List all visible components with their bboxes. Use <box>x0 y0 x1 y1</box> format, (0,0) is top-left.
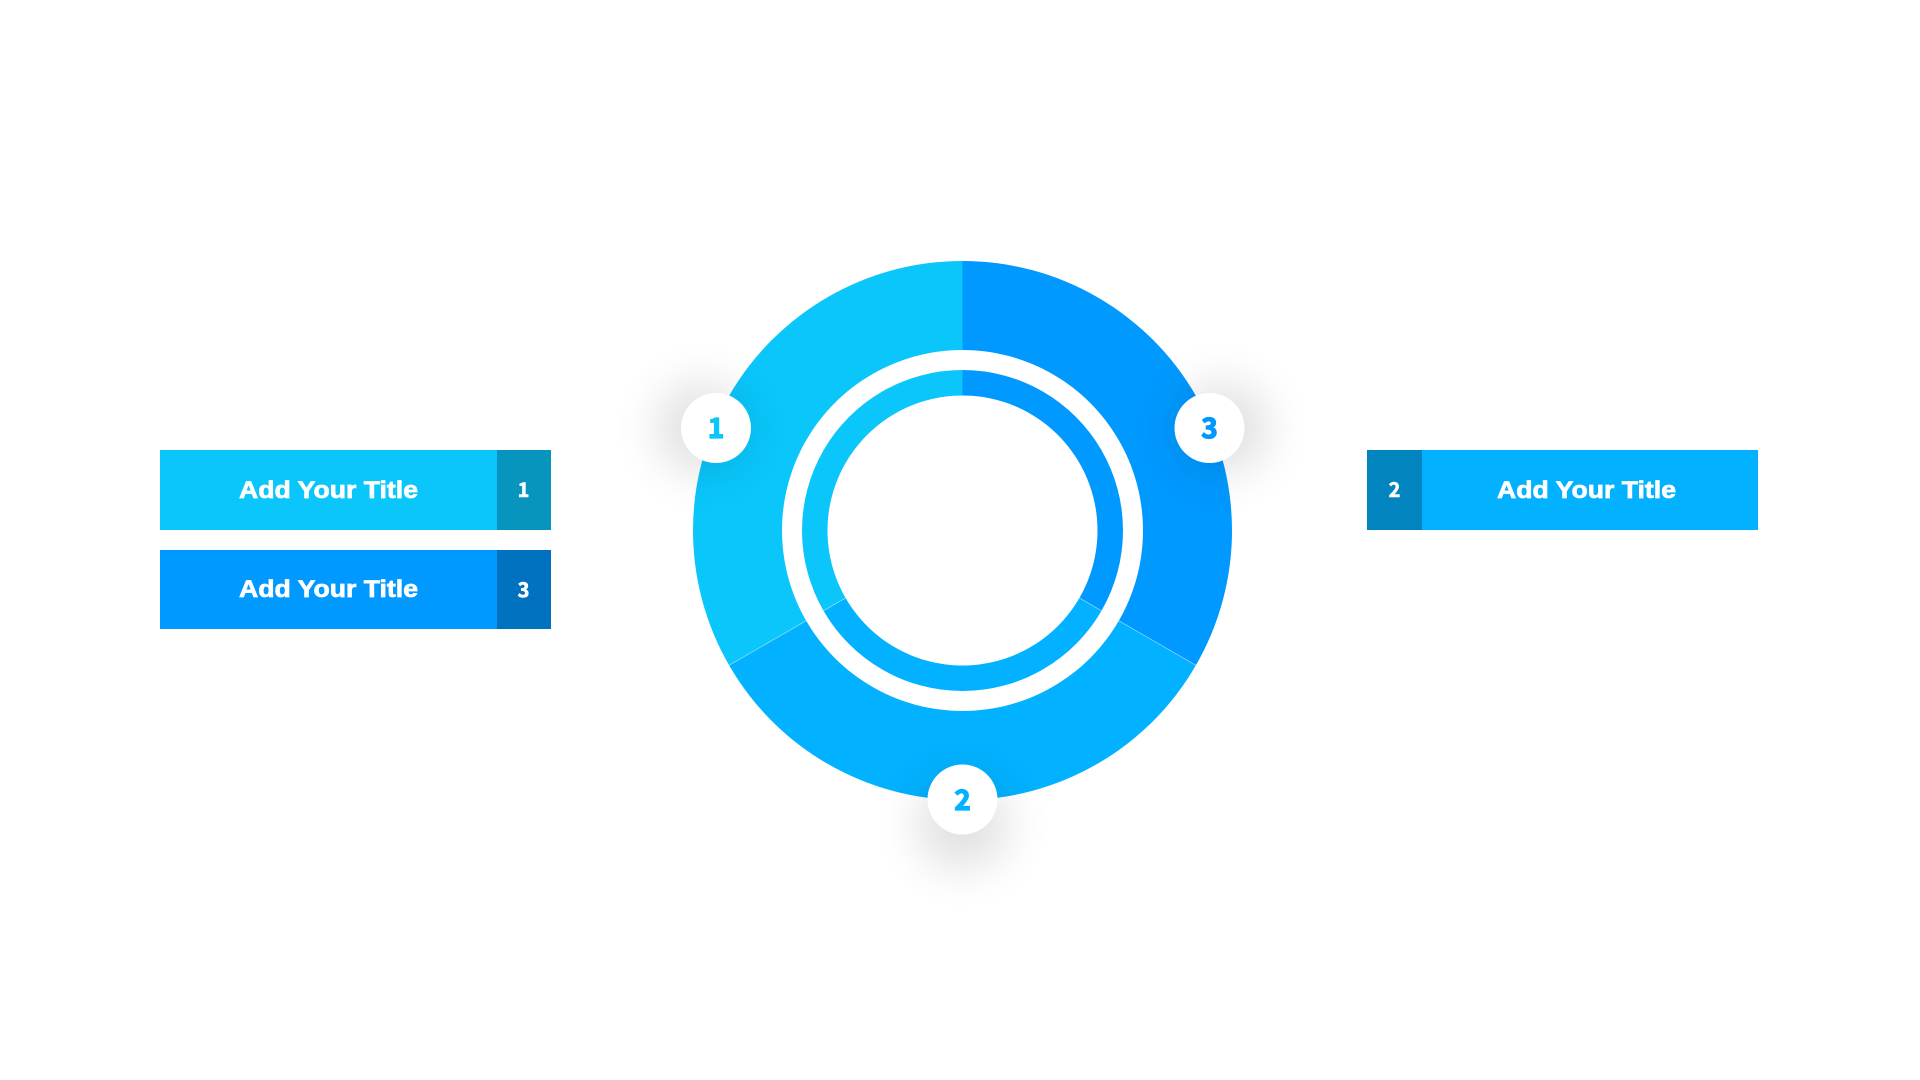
badge 2: 2 <box>954 779 971 819</box>
badge 3: 3 <box>1201 407 1218 447</box>
inner segment 3 <box>962 370 1123 611</box>
inner segment 2 <box>824 598 1102 691</box>
donut chart <box>693 261 1232 800</box>
badge 3 <box>1174 393 1244 463</box>
left title bar 1 <box>160 450 551 530</box>
shadow of badge 2 <box>918 780 1006 868</box>
right title bar 2 <box>1367 450 1758 530</box>
right title bar 2: 2 <box>1389 474 1400 503</box>
badge 2 <box>928 764 998 834</box>
right title bar 2: Add Your Title <box>1497 477 1676 504</box>
outer segment 2 <box>729 621 1196 800</box>
left title bar 3: Add Your Title <box>239 576 418 603</box>
left title bar 3: 3 <box>518 574 529 603</box>
badge 1 <box>681 393 751 463</box>
outer segment 3 <box>962 261 1232 665</box>
left title bar 3 <box>160 550 551 629</box>
left title bar 1: Add Your Title <box>239 477 418 504</box>
badge 1: 1 <box>708 407 724 447</box>
outer segment 1 <box>693 261 962 665</box>
shadow of badge 3 <box>1179 384 1267 472</box>
inner segment 1 <box>802 370 962 611</box>
shadow of badge 1 <box>658 384 746 472</box>
left title bar 1: 1 <box>518 474 529 503</box>
